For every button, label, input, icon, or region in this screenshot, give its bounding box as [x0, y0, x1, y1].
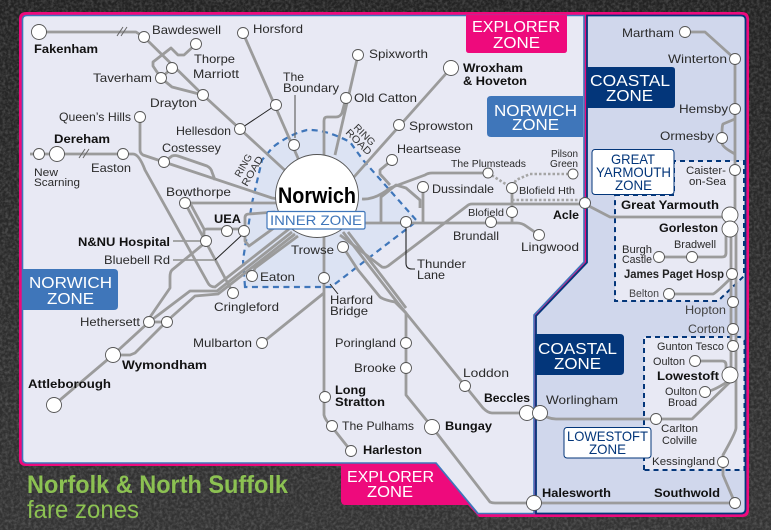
station: Costessey: Costessey	[162, 141, 221, 155]
station: Harleston: Harleston	[363, 443, 422, 457]
station: Heartsease: Heartsease	[397, 142, 461, 156]
zone tag: coastal lower	[535, 334, 624, 375]
station: Halesworth: Halesworth	[542, 486, 611, 500]
station: Beccles: Beccles	[484, 391, 530, 405]
zone tag: coastal top	[587, 67, 675, 108]
station: Poringland: Poringland	[335, 336, 396, 350]
station: Eaton: Eaton	[260, 270, 295, 284]
station: Pilson Green	[550, 149, 578, 179]
station: Thunder Lane: Lane	[417, 268, 445, 282]
station: Blofield: Blofield	[468, 207, 504, 219]
station: Thorpe Marriott: Thorpe	[194, 52, 235, 66]
station: Lowestoft: Lowestoft	[657, 369, 719, 383]
station: Lingwood: Lingwood	[521, 240, 579, 254]
zone tag: great yarmouth: YARMOUTH	[596, 164, 671, 180]
station: Sprowston: Sprowston	[409, 119, 473, 133]
zone tag: norwich left: NORWICH	[29, 275, 112, 292]
station: Bawdeswell	[138, 23, 221, 42]
station: Pilson Green: Pilson	[551, 149, 578, 160]
station: Oulton Broad: Broad	[668, 397, 697, 409]
dotted local links	[488, 173, 585, 200]
station: Trowse: Trowse	[291, 243, 334, 257]
title: fare zones	[27, 496, 139, 524]
zone tag: coastal lower: ZONE	[554, 356, 601, 373]
station: Lingwood	[521, 230, 579, 254]
station: Dereham: Dereham	[54, 132, 110, 146]
station: Wymondham: Wymondham	[122, 358, 207, 372]
station: Thorpe Marriott: Marriott	[193, 67, 240, 81]
station: Carlton Colville: Carlton	[661, 423, 698, 435]
station: Long Stratton: Stratton	[335, 395, 385, 409]
station: Winterton: Winterton	[668, 52, 727, 66]
zone tag: norwich right: ZONE	[512, 117, 559, 134]
station: Caister-on-Sea: Caister-	[686, 165, 726, 177]
station: Oulton	[653, 356, 700, 368]
zone tag: lowestoft: LOWESTOFT	[567, 428, 648, 444]
ring road labels: RING	[233, 152, 255, 180]
station: Thorpe Marriott	[166, 38, 240, 81]
station: Bradwell: Bradwell	[674, 239, 716, 251]
leader lines	[173, 95, 415, 294]
station: Halesworth	[526, 486, 611, 510]
station: Fakenham	[32, 24, 98, 56]
station: Wroxham & Hoveton: Wroxham	[463, 61, 523, 75]
zone tag: great yarmouth: ZONE	[615, 177, 652, 193]
station: Thunder Lane	[400, 216, 466, 282]
station: Dussindale: Dussindale	[432, 182, 494, 196]
station: Harford Bridge: Harford	[330, 293, 373, 307]
title	[27, 471, 288, 524]
station: Burgh Castle: Castle	[622, 254, 652, 266]
station: Caister-on-Sea: on-Sea	[689, 176, 727, 188]
station: Spixworth: Spixworth	[369, 47, 428, 61]
ring road labels: ROAD	[240, 154, 266, 188]
station: Kessingland: Kessingland	[652, 456, 715, 468]
zone tag: great yarmouth: GREAT	[611, 151, 655, 167]
station: New Scarning: Scarning	[34, 177, 80, 189]
station: Taverham: Taverham	[93, 71, 152, 85]
station: Bungay: Bungay	[445, 419, 492, 433]
panel: norwich zone	[22, 16, 584, 514]
station: Burgh Castle: Burgh	[622, 244, 652, 256]
station: Carlton Colville: Colville	[662, 435, 697, 447]
station: Queen's Hills: Queen’s Hills	[59, 110, 131, 124]
station: Pilson Green: Green	[550, 159, 578, 170]
station: Brooke	[354, 361, 412, 375]
station: Heartsease	[386, 142, 461, 166]
ring road labels: RING	[351, 122, 377, 149]
station: Blofield	[468, 206, 518, 219]
station: Lowestoft	[657, 367, 738, 383]
station: Dereham	[50, 132, 110, 162]
station: Cringleford: Cringleford	[214, 300, 279, 314]
station: Hopton: Hopton	[685, 303, 726, 317]
station: Long Stratton: Long	[335, 383, 366, 397]
station: Costessey	[158, 141, 221, 168]
panel: coastal zone	[536, 16, 746, 514]
station: Ormesby	[660, 129, 728, 144]
station: Loddon: Loddon	[463, 366, 509, 380]
station: Eaton	[246, 270, 295, 284]
station: Southwold: Southwold	[654, 486, 720, 500]
station: The Plumsteads	[451, 159, 526, 178]
station: N&NU Hospital: N&NU Hospital	[78, 235, 170, 249]
station: Hethersett: Hethersett	[80, 315, 141, 329]
zone tag: lowestoft: ZONE	[589, 441, 626, 457]
station: Blofield Hth	[506, 182, 575, 197]
station: N&NU Hospital	[78, 235, 212, 249]
station: Oulton Broad	[665, 386, 710, 409]
zone tag: norwich right: NORWICH	[494, 103, 577, 120]
station: Bradwell	[674, 239, 716, 262]
station: Southwold	[654, 486, 740, 508]
station: New Scarning: New	[34, 167, 58, 179]
zone tag: norwich right	[487, 96, 583, 137]
station: Easton: Easton	[91, 161, 131, 175]
zone tag: great yarmouth	[592, 150, 674, 194]
station: Oulton: Oulton	[653, 356, 685, 368]
zone tag: lowestoft	[564, 428, 651, 458]
station: The Plumsteads: The Plumsteads	[451, 159, 526, 170]
station: Wymondham	[106, 348, 207, 372]
station: Trowse	[291, 242, 348, 257]
station: Bowthorpe: Bowthorpe	[166, 185, 231, 199]
ring road labels: ROAD	[343, 127, 373, 158]
station: Martham: Martham	[622, 26, 674, 40]
zone tag: norwich left	[23, 269, 118, 310]
station: Ormesby: Ormesby	[660, 129, 714, 143]
station: Belton: Belton	[629, 288, 659, 300]
station: Hemsby: Hemsby	[679, 102, 728, 116]
station: Harford Bridge: Bridge	[330, 304, 368, 318]
station: Acle: Acle	[553, 208, 579, 222]
station: Attleborough	[28, 377, 111, 412]
station: Wroxham & Hoveton: & Hoveton	[463, 74, 527, 88]
station: James Paget Hosp: James Paget Hosp	[624, 269, 724, 281]
zone tag: coastal lower: COASTAL	[538, 341, 617, 358]
station: Cringleford	[214, 288, 279, 314]
station: Gorleston	[659, 221, 738, 237]
zone tag: explorer top: EXPLORER	[472, 19, 560, 36]
zone tag: explorer bottom: EXPLORER	[347, 469, 434, 486]
station: Bungay	[424, 419, 492, 434]
station: Old Catton: Old Catton	[354, 91, 417, 105]
station: Hopton	[685, 296, 738, 317]
station: The Boundary: The	[283, 70, 304, 84]
station: Beccles	[484, 391, 534, 420]
road slash marks	[79, 27, 127, 158]
station: Worlingham	[532, 393, 618, 420]
station: Brundall: Brundall	[453, 229, 499, 243]
station: Caister-on-Sea	[686, 164, 740, 188]
station: Burgh Castle	[622, 244, 664, 266]
station: The Pulhams: The Pulhams	[342, 419, 414, 433]
station: Drayton	[150, 90, 208, 110]
station: Norwich hub: Norwich	[278, 183, 356, 208]
station: The Boundary: Boundary	[283, 81, 339, 95]
station: Acle	[553, 198, 590, 222]
station: Drayton: Drayton	[150, 96, 197, 110]
station: Brundall	[453, 216, 499, 243]
label: Bluebell Rd: Bluebell Rd	[104, 253, 170, 267]
station: Mulbarton: Mulbarton	[193, 336, 252, 350]
panel: inner zone	[243, 130, 417, 287]
zone tag: explorer top	[466, 15, 567, 53]
station: New Scarning	[34, 148, 80, 189]
station: Easton	[91, 148, 131, 175]
station: Wroxham & Hoveton	[444, 60, 527, 88]
station: Bowthorpe	[166, 185, 231, 208]
zone tag: coastal top: ZONE	[606, 88, 653, 105]
station: Worlingham: Worlingham	[546, 393, 618, 407]
station: Carlton Colville	[650, 414, 698, 447]
station: Horsford	[238, 22, 303, 38]
zone tag: norwich left: ZONE	[47, 291, 94, 308]
station: Long Stratton	[320, 383, 385, 409]
ring road labels	[233, 122, 377, 188]
inner zone tag: INNER ZONE	[270, 212, 362, 228]
station: Martham	[622, 26, 690, 40]
zone tag: coastal top: COASTAL	[590, 73, 670, 90]
station: Attleborough: Attleborough	[28, 377, 111, 391]
station: Great Yarmouth: Great Yarmouth	[621, 198, 719, 212]
panel: great yarmouth zone	[615, 161, 744, 301]
zone tag: explorer top: ZONE	[493, 35, 540, 52]
station: Loddon	[460, 366, 509, 392]
station: Oulton Broad: Oulton	[665, 386, 697, 398]
zone tag: explorer bottom: ZONE	[367, 484, 413, 501]
station: Blofield Hth: Blofield Hth	[519, 186, 575, 197]
station: The Boundary	[270, 70, 339, 150]
station: Thunder Lane: Thunder	[417, 257, 466, 271]
station: Hellesdon: Hellesdon	[176, 124, 231, 138]
station: Gorleston: Gorleston	[659, 221, 718, 235]
station: Great Yarmouth	[621, 198, 738, 223]
station: Horsford: Horsford	[253, 22, 303, 36]
station: Spixworth	[352, 47, 428, 61]
station: UEA	[214, 212, 250, 236]
station: Hethersett	[80, 315, 172, 329]
station: Corton: Corton	[688, 322, 725, 336]
station: UEA: UEA	[214, 212, 241, 226]
station: Belton	[629, 288, 674, 300]
station: Gunton Tesco: Gunton Tesco	[657, 341, 724, 353]
station: Brooke: Brooke	[354, 361, 396, 375]
station: Bawdeswell: Bawdeswell	[152, 23, 221, 37]
title: Norfolk & North Suffolk	[27, 471, 288, 499]
panel: lowestoft zone	[644, 337, 744, 470]
zone tag: explorer bottom	[341, 463, 478, 514]
station: Harford Bridge	[318, 272, 373, 318]
station: Norwich hub	[276, 154, 358, 238]
station: Fakenham: Fakenham	[34, 42, 98, 56]
